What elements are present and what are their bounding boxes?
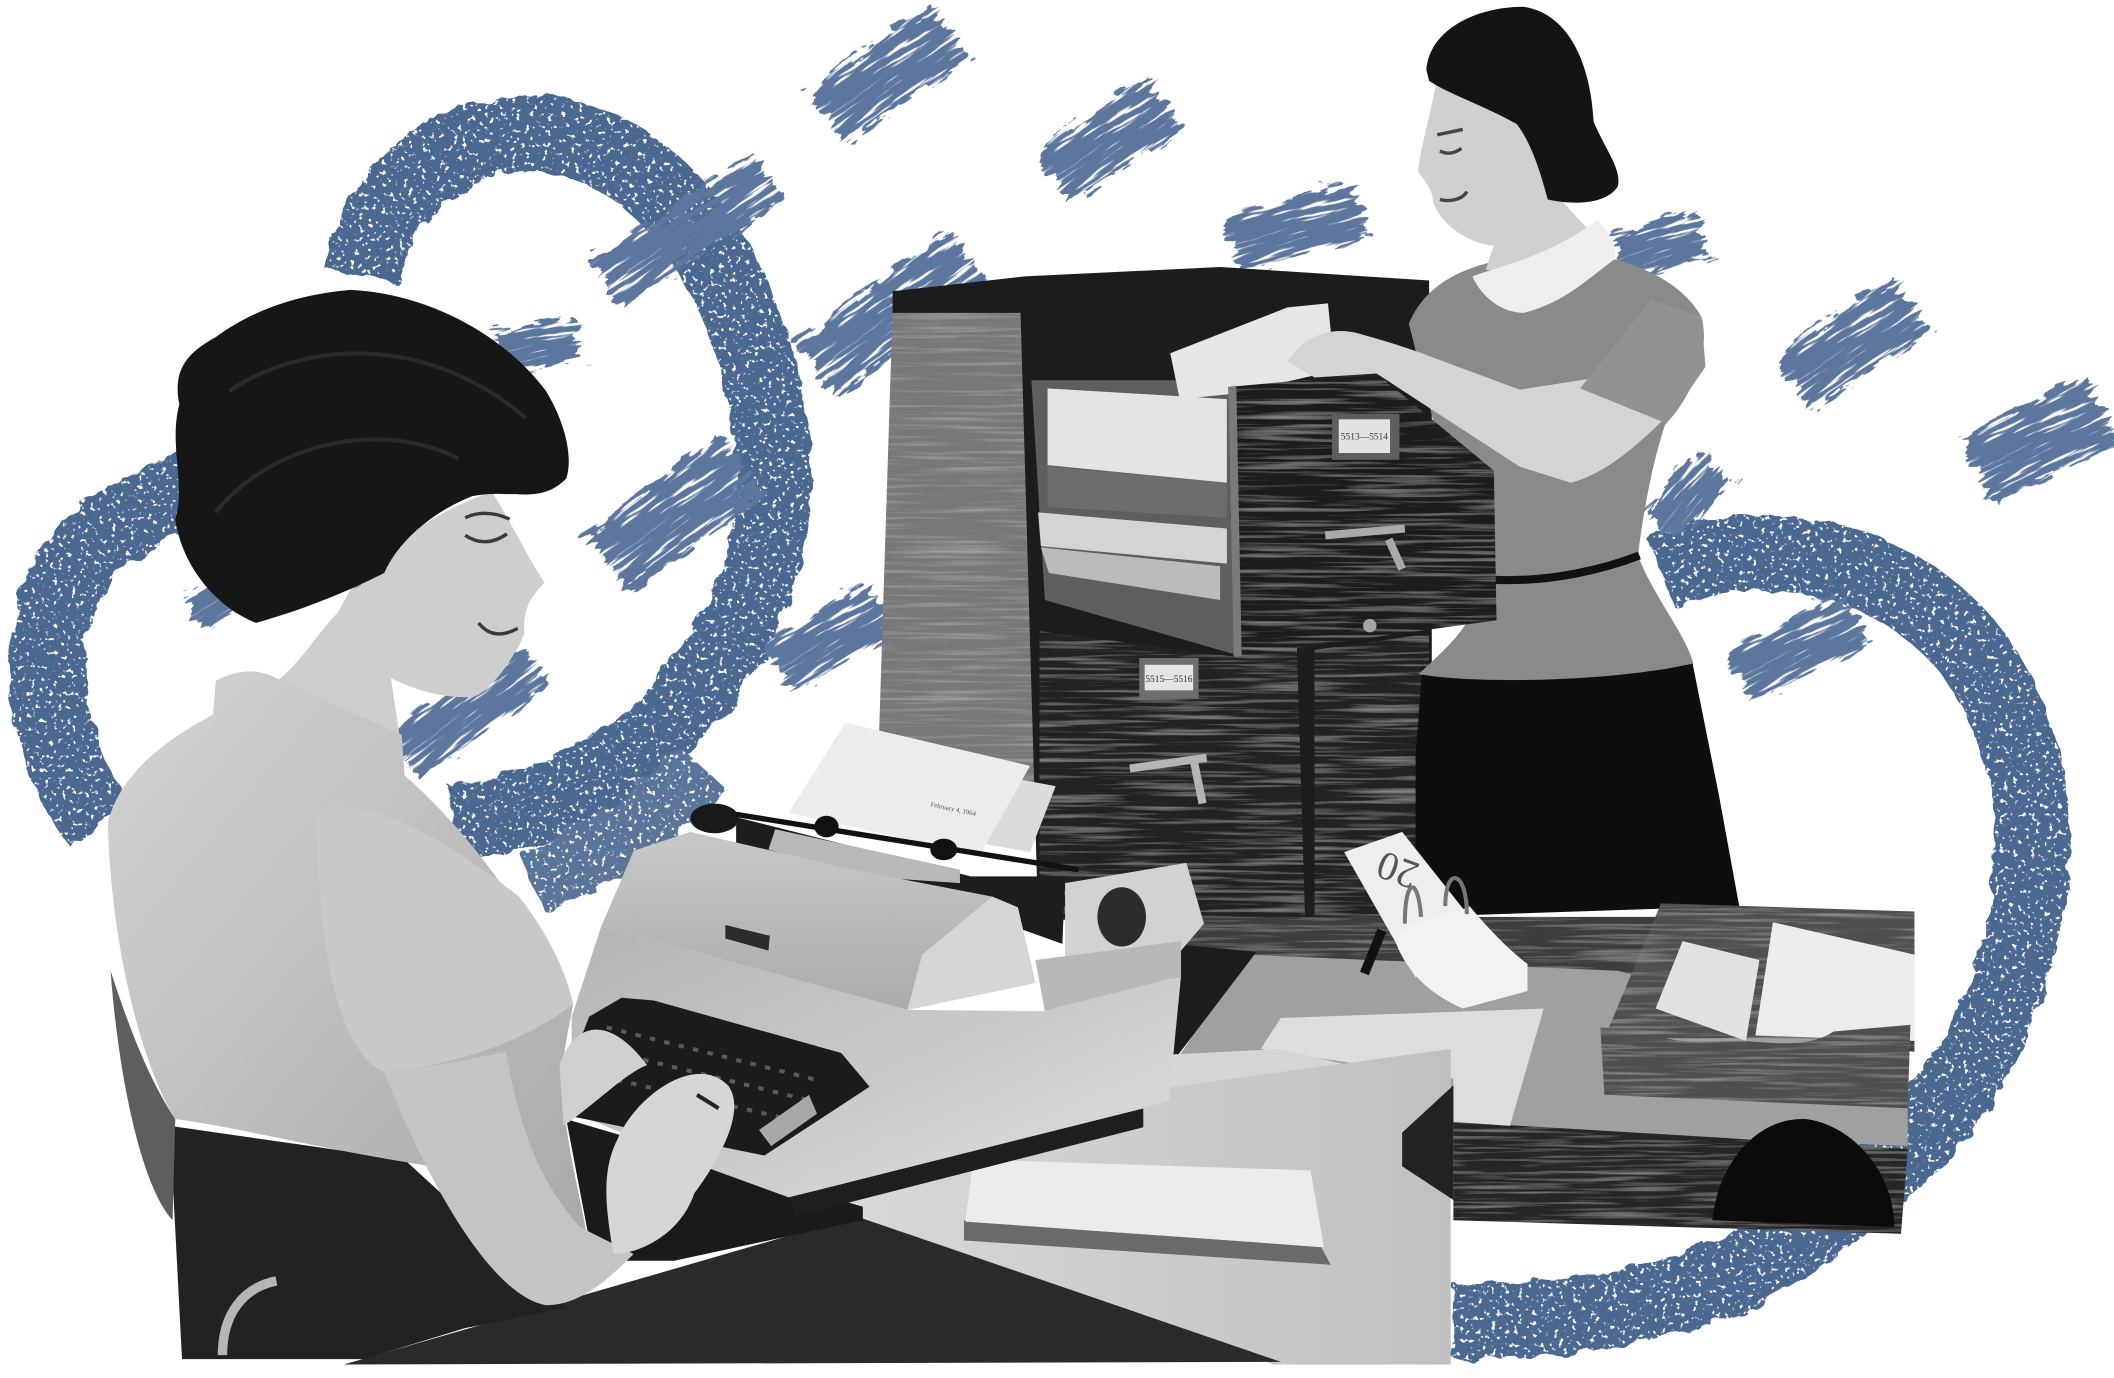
cabinet top — [893, 267, 1429, 318]
drawer label — [1139, 658, 1199, 698]
eye, brow and lips — [465, 513, 518, 634]
dash: top — [808, 4, 969, 144]
paper in carriage — [789, 723, 1056, 855]
right slips — [1755, 922, 1914, 1041]
sleeve — [317, 807, 573, 1072]
tray front — [1600, 1025, 1910, 1108]
platen knob — [1097, 887, 1146, 947]
dash: far right one — [1775, 277, 1930, 411]
cover right facet — [907, 897, 1035, 1010]
stacked papers — [1038, 512, 1227, 564]
drawer label: 5513—5514 — [1341, 433, 1388, 443]
brush dashes — [185, 4, 2114, 781]
dash: cabinet side upper — [796, 231, 989, 397]
hand on keys, left — [560, 1030, 647, 1126]
left carriage knob — [690, 804, 739, 833]
dash: inside loop two — [591, 153, 784, 308]
dash: far right two — [1961, 376, 2114, 503]
earring — [346, 572, 363, 588]
telephone shape — [1712, 1119, 1894, 1227]
calendar date, printed upside down: 20 — [1371, 842, 1424, 898]
dark wedge beside typewriter — [1170, 944, 1257, 1065]
cover badge — [725, 925, 770, 951]
desk papers — [1261, 1009, 1544, 1126]
hair — [1426, 7, 1618, 203]
sweater — [1409, 252, 1704, 680]
paper in carriage: February 4, 1964 — [930, 801, 977, 818]
dash: inside loop one — [586, 435, 764, 592]
neck and face — [270, 492, 545, 769]
carriage bar — [736, 814, 1079, 870]
front pad — [1394, 906, 1528, 1009]
dress — [108, 671, 586, 1247]
platen and ribbon area — [736, 817, 1065, 944]
dark desk corner — [344, 1216, 1281, 1365]
desk back edge — [1176, 917, 1914, 1052]
desk calendar — [1344, 832, 1528, 1009]
dark gap under keyboard — [566, 1119, 863, 1261]
dash: right top — [1612, 209, 1710, 282]
small note — [1146, 1049, 1348, 1112]
dash: cabinet side lower — [764, 582, 897, 693]
drawer knob — [1363, 619, 1377, 632]
chair — [170, 1126, 566, 1359]
right carriage end — [1065, 863, 1204, 964]
hand on keys, right — [606, 1074, 734, 1254]
typewriter — [560, 723, 1204, 1197]
file cabinet — [879, 267, 1432, 920]
right recess — [1035, 941, 1181, 1011]
typewriter cover — [601, 832, 1035, 1010]
dash: near shoulder — [386, 638, 549, 781]
left desk — [755, 1049, 1451, 1365]
cabinet side panel — [879, 313, 1038, 809]
right desk — [1146, 832, 1914, 1234]
cabinet front — [1021, 316, 1432, 920]
face and neck — [1418, 78, 1588, 271]
sleeve — [1580, 299, 1705, 423]
chair metal bracket — [222, 1281, 276, 1355]
calendar stand — [1364, 930, 1382, 973]
lower right drawer — [1315, 634, 1429, 920]
typewriter lower body — [572, 926, 1181, 1197]
typewriter foot shadow — [789, 1108, 1143, 1216]
desk front dark edge — [1453, 1122, 1908, 1234]
drawer interior — [1031, 380, 1234, 654]
back shadow — [111, 971, 175, 1220]
arm — [384, 1052, 634, 1305]
hair — [175, 290, 569, 623]
loop: lower left curl — [533, 769, 704, 883]
space and shift keys — [759, 1095, 817, 1146]
rings — [1405, 878, 1467, 924]
stapler — [1402, 1085, 1453, 1200]
skirt — [1416, 661, 1739, 917]
belt — [1494, 556, 1639, 580]
arm reaching to drawer — [1288, 331, 1665, 483]
drawer handle — [1325, 529, 1405, 569]
dash: behind woman right — [1644, 450, 1732, 542]
key rows — [588, 1027, 822, 1119]
paper being filed — [1170, 303, 1335, 399]
ring — [697, 1095, 719, 1108]
eye and smile — [1437, 129, 1467, 201]
desk surface — [1173, 955, 1908, 1146]
drawer label: 5515—5516 — [1145, 675, 1193, 685]
typing woman — [108, 290, 734, 1359]
file folders — [1048, 388, 1227, 483]
hair strands — [216, 353, 526, 512]
open file drawer — [1228, 373, 1497, 657]
drawer label — [1332, 414, 1399, 460]
notepad — [964, 1160, 1331, 1265]
dash: near hair bottom — [185, 556, 279, 631]
paper tray — [1600, 903, 1914, 1108]
paper bail rollers — [814, 816, 957, 860]
lower left drawer — [1039, 631, 1305, 920]
loop: large left knot — [48, 133, 774, 825]
dash: right loop inner — [1727, 592, 1870, 702]
loop: large right arc — [1453, 553, 2032, 1321]
dash: middle right — [1224, 181, 1370, 272]
keyboard — [560, 998, 870, 1156]
back pad — [1344, 832, 1470, 978]
left slips — [1656, 941, 1759, 1041]
dash: near hair — [494, 316, 582, 375]
dash: upper middle — [1036, 77, 1183, 204]
woman filing — [1409, 7, 1739, 917]
drawer handle — [1130, 758, 1207, 804]
white collar — [1472, 220, 1616, 313]
